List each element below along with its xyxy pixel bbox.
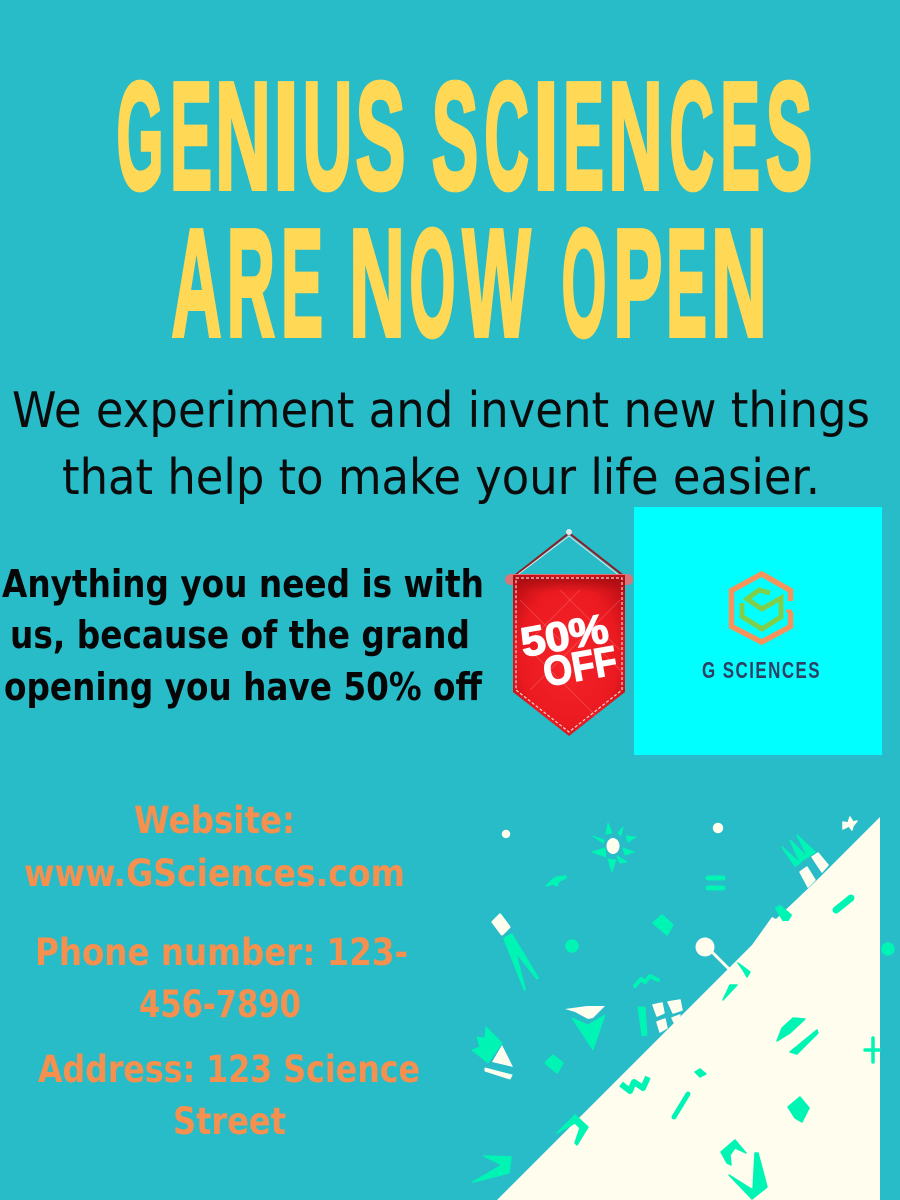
icon: paper plane	[565, 1006, 605, 1050]
title: N	[711, 198, 767, 369]
icons: mint shapes on the teal area	[546, 835, 894, 1000]
icon: 50% off red pennant: OFF	[540, 637, 620, 695]
contact details	[24, 799, 420, 1143]
title: E	[281, 198, 323, 369]
title: W	[462, 198, 531, 369]
title: E	[666, 198, 707, 369]
title: S	[432, 51, 478, 222]
icon: sun	[592, 823, 636, 872]
title: N	[608, 51, 663, 222]
intro text: that help to make your life easier.	[62, 449, 820, 506]
title: C	[669, 51, 714, 222]
decorative science illustration	[472, 817, 894, 1200]
title: E	[563, 51, 604, 222]
title	[116, 51, 812, 369]
title: S	[356, 51, 406, 222]
title: O	[410, 198, 455, 369]
contact details: www.GSciences.com	[24, 852, 405, 895]
title: E	[720, 51, 760, 222]
title: N	[215, 51, 271, 222]
title: R	[227, 198, 275, 369]
title: G	[116, 51, 164, 222]
title: P	[613, 198, 662, 369]
icon: shuttle cone	[472, 1027, 513, 1079]
icons: mint shapes on the cream area	[473, 1018, 879, 1199]
logo panel: G Sciences: G SCIENCES	[702, 657, 821, 683]
offer text: opening you have 50% off	[4, 665, 483, 709]
offer text: Anything you need is with	[2, 562, 484, 606]
contact details: Phone number: 123-	[35, 931, 408, 974]
icon: hexagon cube logo	[732, 574, 792, 642]
icon: 50% off red pennant	[505, 529, 633, 736]
contact details: Street	[173, 1100, 286, 1143]
title: I	[533, 51, 559, 222]
title: C	[484, 51, 529, 222]
cream diagonal triangle	[497, 817, 880, 1200]
title: E	[170, 51, 212, 222]
icon: 50% off red pennant: 50%	[517, 605, 612, 666]
title: U	[303, 51, 352, 222]
icon: cream shapes on the slope and sky	[502, 817, 857, 981]
offer text	[2, 562, 484, 709]
contact details: Website:	[134, 799, 295, 842]
title: O	[562, 198, 606, 369]
title: N	[349, 198, 405, 369]
title: A	[172, 198, 222, 369]
icon: compass	[493, 915, 539, 991]
logo panel: G Sciences	[634, 507, 882, 755]
contact details: 456-7890	[139, 983, 301, 1026]
icon: cream pin with ball	[696, 938, 729, 969]
title: I	[273, 51, 299, 222]
offer text: us, because of the grand	[10, 613, 470, 657]
text: S	[766, 51, 812, 222]
icon: grid tile	[638, 1000, 682, 1036]
contact details: Address: 123 Science	[38, 1048, 420, 1091]
intro text	[12, 382, 870, 506]
